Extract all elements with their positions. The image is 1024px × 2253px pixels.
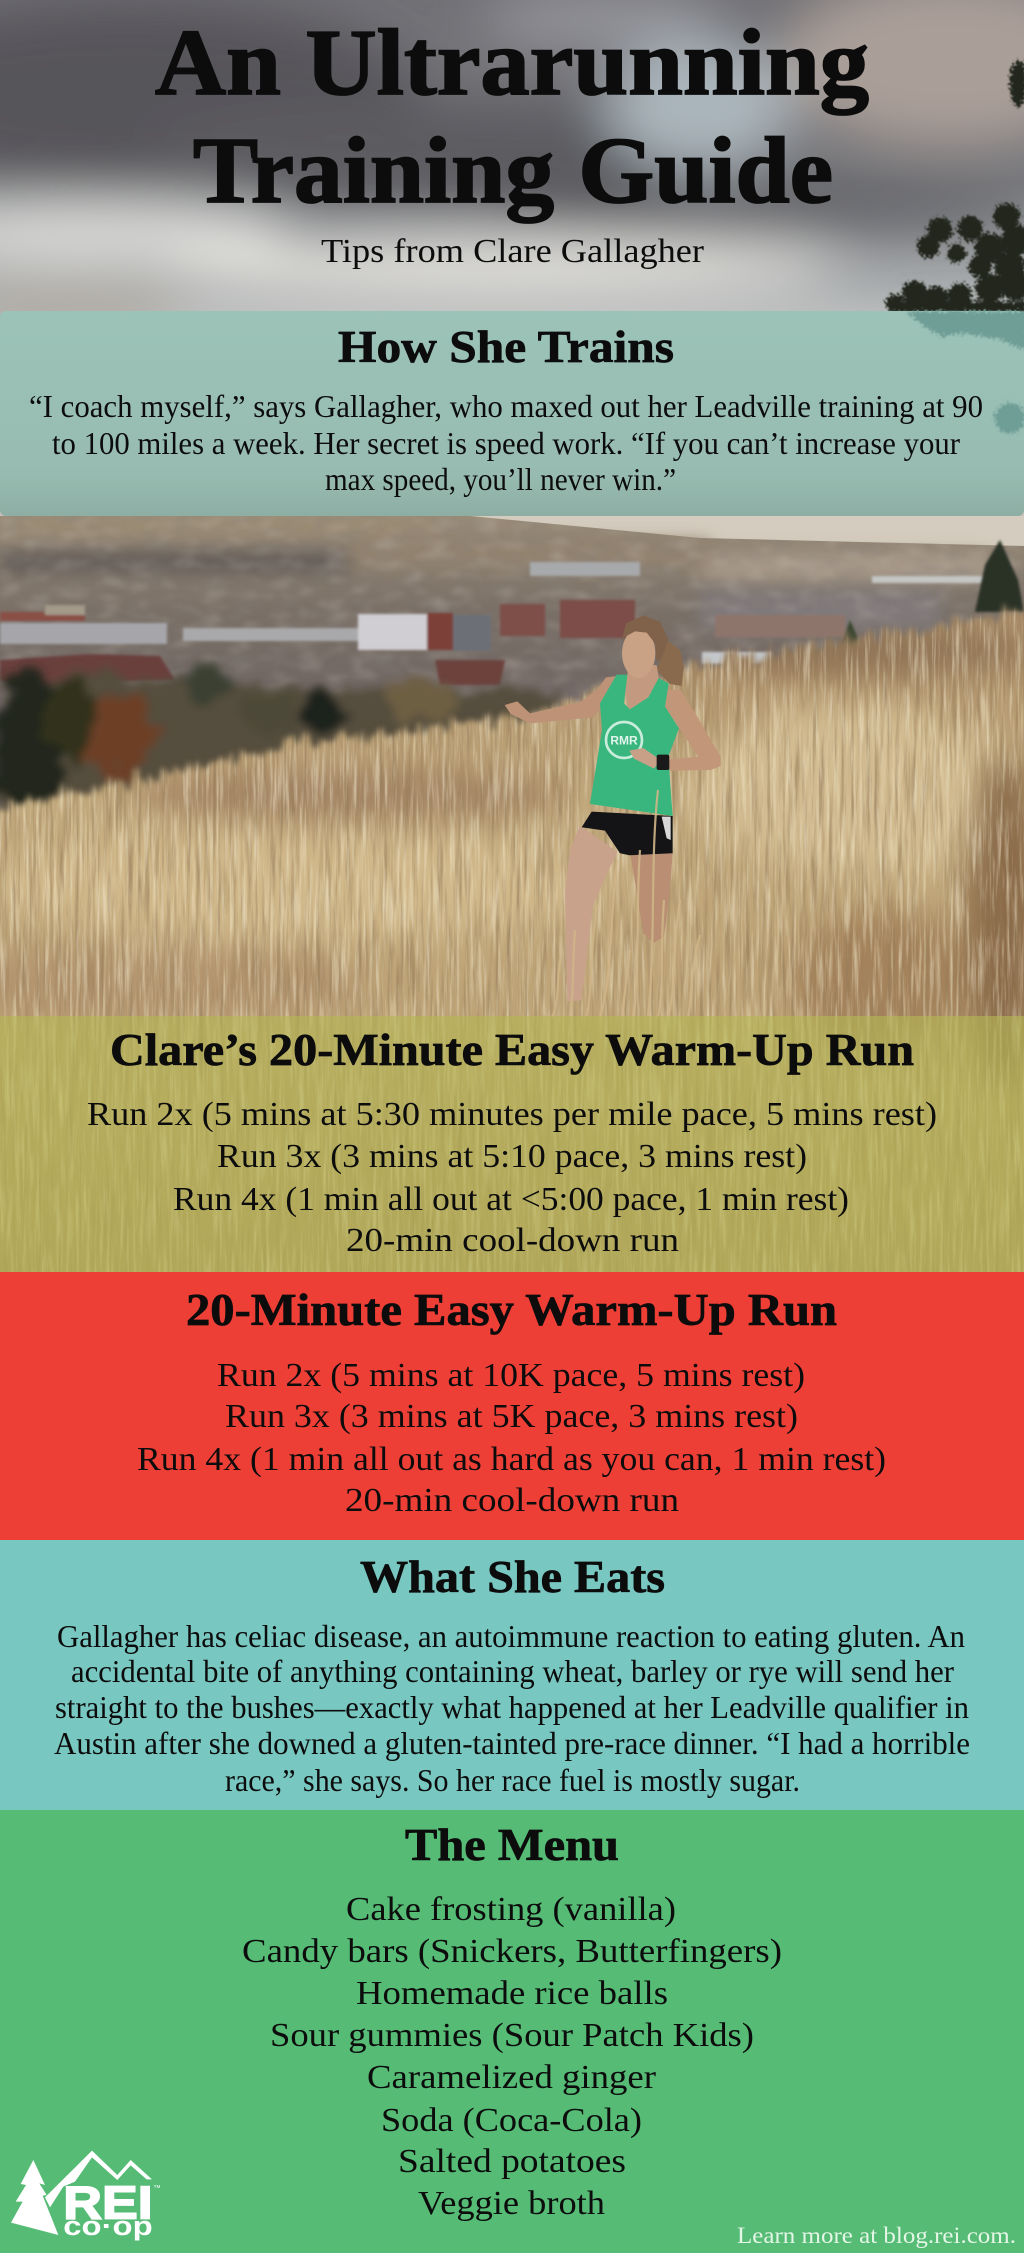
list: intervals: 20-min cool-down run [345, 1482, 679, 1519]
subtitle: Tips from Clare Gallagher [321, 233, 705, 270]
list: Clare's intervals: Run 3x (3 mins at 5:10 pace, 3 mins rest) [217, 1138, 807, 1175]
heading: warm-up: 20-Minute Easy Warm-Up Run [186, 1285, 837, 1335]
text block: what she eats: race,” she says. So her race fuel is mostly sugar. [225, 1762, 800, 1798]
list: intervals: Run 3x (3 mins at 5K pace, 3 mins rest) [225, 1398, 798, 1435]
text block: what she eats: straight to the bushes—exactly what happened at her Leadville qualifier in [55, 1689, 969, 1725]
list: menu items: Salted potatoes [398, 2143, 626, 2180]
heading: the menu: The Menu [405, 1820, 619, 1870]
logo tree [11, 2160, 58, 2235]
list: intervals: Run 2x (5 mins at 10K pace, 5 mins rest) [217, 1357, 805, 1394]
list: Clare's intervals: 20-min cool-down run [346, 1222, 679, 1259]
text block: how she trains: “I coach myself,” says Gallagher, who maxed out her Leadville training at 90 [29, 388, 983, 424]
list: intervals: Run 4x (1 min all out as hard as you can, 1 min rest) [137, 1441, 886, 1478]
text block: how she trains: to 100 miles a week. Her secret is speed work. “If you can’t increase your [52, 425, 960, 461]
text block: what she eats: accidental bite of anything containing wheat, barley or rye will send her [71, 1653, 954, 1689]
list: menu items: Cake frosting (vanilla) [346, 1891, 676, 1928]
panel: what she eats [0, 1540, 1024, 1811]
pine branches top right [886, 60, 1024, 313]
background photo: stormy sky [0, 0, 1024, 520]
logo co-op: co·op [63, 2211, 153, 2241]
text block: what she eats [54, 1618, 970, 1798]
panel: how she trains [0, 311, 1024, 516]
list: intervals [137, 1357, 886, 1519]
panel: generic warm-up run [0, 1272, 1024, 1540]
title: An Ultrarunning [155, 11, 869, 115]
photo: runner in golden grass [0, 516, 1024, 1280]
heading: what she eats: What She Eats [360, 1552, 665, 1602]
list: menu items: Sour gummies (Sour Patch Kids) [270, 2017, 754, 2054]
tree line on the left [0, 665, 560, 825]
foreground grass blades over legs [552, 790, 700, 1017]
title [155, 11, 869, 223]
text block: how she trains [29, 388, 983, 497]
hair [622, 615, 668, 662]
text block: what she eats: Gallagher has celiac disease, an autoimmune reaction to eating gluten. An [57, 1618, 965, 1654]
neck and chest [624, 665, 659, 709]
logo mountains [45, 2151, 152, 2207]
distant hills and town [0, 516, 1024, 836]
small pines on the right [840, 540, 1024, 650]
list: menu items: Candy bars (Snickers, Butterfingers) [242, 1933, 782, 1970]
right arm [665, 689, 721, 771]
green tank top [590, 675, 679, 816]
list: Clare's intervals: Run 2x (5 mins at 5:30 minutes per mile pace, 5 mins rest) [87, 1096, 937, 1133]
face [622, 631, 656, 672]
icon: REI co-op logo [11, 2151, 160, 2241]
ponytail [657, 640, 684, 686]
right leg [630, 852, 673, 943]
text block: what she eats: Austin after she downed a gluten-tainted pre-race dinner. “I had a horrible [54, 1725, 970, 1761]
text block: how she trains: max speed, you’ll never win.” [325, 461, 676, 497]
heading: Clare's warm-up: Clare’s 20-Minute Easy Warm-Up Run [110, 1025, 914, 1075]
list: menu items: Caramelized ginger [367, 2059, 657, 2096]
left arm [505, 676, 617, 723]
watch [657, 755, 669, 770]
list: menu items: Veggie broth [418, 2185, 605, 2222]
list: menu items: Soda (Coca-Cola) [381, 2102, 642, 2139]
logo wordmark: REI [63, 2176, 153, 2228]
list: Clare's intervals: Run 4x (1 min all out at <5:00 pace, 1 min rest) [173, 1181, 849, 1218]
panel: the menu [0, 1810, 1024, 2253]
pine shadows through panel [907, 312, 1024, 434]
runner [505, 615, 721, 1002]
list: menu items: Homemade rice balls [356, 1975, 668, 2012]
hand [629, 748, 661, 769]
panel: Clare's warm-up run [0, 1016, 1024, 1272]
shirt logo [606, 722, 642, 758]
shirt logo: RMR [610, 734, 638, 748]
shorts [582, 812, 673, 855]
list: Clare's intervals [87, 1096, 937, 1259]
title: Training Guide [193, 119, 833, 223]
logo trademark: TM [154, 2184, 160, 2189]
left leg [565, 826, 617, 1002]
grass hillside [0, 600, 1024, 1280]
list: menu items [242, 1891, 782, 2222]
footer note: Learn more at blog.rei.com. [737, 2223, 1016, 2248]
heading: how she trains: How She Trains [338, 322, 674, 372]
